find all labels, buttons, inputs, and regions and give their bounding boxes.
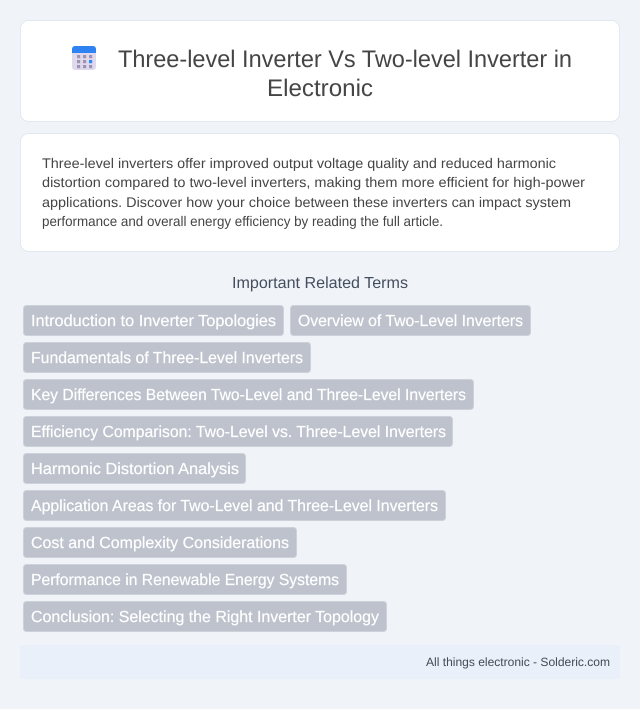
panel: title card [20,20,620,122]
chip: introduction: Introduction to Inverter Topologies [31,313,276,330]
text block: description [42,155,585,229]
chip: key differences [24,380,474,410]
heading: title: Three-level Inverter Vs Two-level Inverter in [118,46,572,73]
list: related term chips [24,306,530,632]
chip: efficiency: Efficiency Comparison: Two-Level vs. Three-Level Inverters [31,424,446,441]
footer: All things electronic - Solderic.com [426,655,610,669]
chip: harmonic distortion [24,454,246,484]
chip: cost: Cost and Complexity Considerations [31,535,289,552]
chip: harmonic distortion: Harmonic Distortion Analysis [31,461,239,478]
chip: fundamentals: Fundamentals of Three-Level Inverters [31,350,303,367]
heading: title [118,46,572,102]
chip: conclusion [24,602,386,632]
chip: two-level overview [290,306,530,336]
chip: cost [24,528,296,558]
chip: application areas: Application Areas for Two-Level and Three-Level Inverters [31,498,438,515]
heading: title: Electronic [267,75,373,102]
icon: calendar [72,46,96,70]
chip: renewable [24,564,346,594]
heading: important related terms: Important Related Terms [232,275,408,292]
chip: conclusion: Conclusion: Selecting the Right Inverter Topology [31,609,379,626]
text block: description: distortion compared to two-level inverters, making them more efficient for high-power [42,174,585,190]
text block: description: performance and overall energy efficiency by reading the full article. [42,213,443,229]
chip: efficiency [24,416,452,446]
chip: renewable: Performance in Renewable Energy Systems [31,572,339,589]
panel: description [20,134,620,252]
text block: description: applications. Discover how your choice between these inverters can impact system [42,194,571,210]
chip: key differences: Key Differences Between Two-Level and Three-Level Inverters [31,387,466,404]
chip: fundamentals [24,342,310,372]
text block: description: Three-level inverters offer improved output voltage quality and reduced harmonic [42,155,556,171]
footer [20,645,620,679]
chip: application areas [24,490,446,520]
chip: two-level overview: Overview of Two-Level Inverters [298,313,523,330]
chip: introduction [24,306,284,336]
